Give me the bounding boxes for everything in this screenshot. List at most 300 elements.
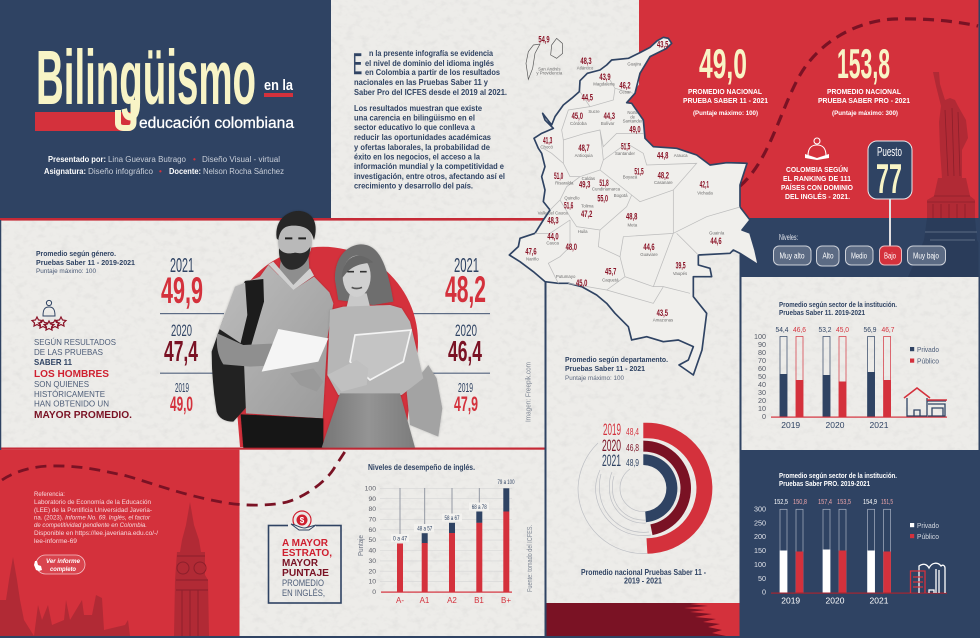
heading: en la: en la [264,77,294,94]
gender conclusion: MAYOR PROMEDIO. [34,410,132,421]
ring 2021 [643,454,677,522]
map department names: de [630,114,636,119]
values: 54,4 [776,325,788,334]
map values: 54,9 [538,34,550,44]
values: 53,2 [818,325,832,334]
values [776,325,894,334]
map department names: Santander [623,119,643,124]
map values: 55,0 [597,194,608,204]
intro paragraph: el nivel de dominio del idioma inglés [365,59,495,68]
woman [322,244,442,448]
horizontal red rule [0,218,545,221]
map values: 44,6 [710,236,722,246]
illustration: Big Ben [174,502,209,636]
map department names: Caquetá [602,277,619,282]
map department names: Quindío [564,196,580,201]
map values: 47,6 [525,246,537,256]
map department names: Boyacá [623,175,638,180]
national average Saber 11: PROMEDIO NACIONAL [688,87,762,96]
face [343,256,371,297]
map values: 48,2 [658,170,669,180]
national average Saber 11: 49,0 [699,40,747,87]
map department names: Vichada [697,191,713,196]
map values: 44,5 [582,93,593,103]
years: 2020 [826,596,845,606]
intro paragraph: sector educativo lo que conlleva a [354,123,476,132]
x labels [396,596,511,605]
bars [397,488,509,592]
national average Saber 11: PRUEBA SABER 11 - 2021 [683,96,768,105]
panel: red top right [627,0,980,277]
chart title: Niveles de desempeño de inglés. [368,463,475,472]
map department names: Guainía [709,231,725,236]
map values: 48,3 [547,216,559,226]
department heading: Puntaje máximo: 100 [565,375,624,382]
report button: Ver informe [46,558,80,565]
heading: Pruebas Saber PRO. 2019-2021 [779,479,870,488]
radial chart [578,420,712,554]
radial guides [578,443,651,554]
gender conclusion [34,337,132,421]
department heading: Pruebas Saber 11 - 2021 [565,364,646,373]
credits: • [159,167,162,176]
strata text [282,538,332,598]
men stats [160,255,224,416]
heading [779,300,897,317]
legend: Privado [917,347,939,354]
women stats: 2021 [454,255,479,277]
map values: 43,5 [657,39,668,49]
horizontal red rule bottom [0,448,545,450]
level button [774,246,811,265]
torso [327,305,423,395]
source: Fuente: tomado del ICFES. [527,525,534,592]
ranking text [781,165,853,201]
y axis: 30 [758,388,766,397]
map values: 44,6 [643,242,655,252]
women stats: 48,2 [445,269,486,310]
map values: 51,0 [554,171,563,181]
map department names: Meta [628,223,638,228]
panel: title: Bilingüismo [36,35,256,121]
y axis labels: 90 [368,496,376,503]
values: 150,8 [793,497,807,506]
map values: 45,0 [572,111,583,121]
dashed route upper [740,19,978,186]
axis line [381,592,512,593]
map department names: Vaupés [673,271,687,276]
reference text: (LEE) de la Pontificia Universidad Javeria- [34,507,152,514]
reference text: Disponible en https://lee.javeriana.edu.co/-/ [34,530,158,537]
y axis [754,504,766,596]
radial labels: 48,9 [626,458,639,469]
backpack [212,279,263,422]
y axis: 40 [758,380,766,389]
intro paragraph: n la presente infografía se evidencia [369,49,493,58]
level button: Bajo [884,252,896,260]
heading gender: Pruebas Saber 11 - 2019-2021 [36,258,135,267]
map department names: Cauca [546,240,560,245]
strata text: ESTRATO, [282,548,332,559]
illustration: Statue of Liberty [908,72,980,277]
strata text: A MAYOR [282,538,329,549]
ranking text: COLOMBIA SEGÚN [786,165,848,174]
map department names: Norte [627,110,639,115]
neck [278,255,310,292]
panel: reference [0,450,346,636]
y axis: 100 [754,332,766,341]
radial caption: Promedio nacional Pruebas Saber 11 - [581,568,706,577]
gender conclusion: DE LAS PRUEBAS [34,347,103,357]
credits: Lina Guevara Butrago [108,155,187,164]
map department names: Risaralda [555,180,574,185]
y axis: 50 [758,372,766,381]
map values: 49,0 [629,124,641,134]
gender conclusion: HAN OBTENIDO UN [34,398,109,408]
panel: title [0,0,331,218]
gender conclusion: SABER 11 [34,357,72,367]
y axis labels: 0 [372,589,376,596]
strata text: PROMEDIO [282,578,324,588]
level button [816,246,839,266]
legend: Público [917,358,939,366]
map values: 41,3 [543,135,552,145]
map department names: y Providencia [536,71,563,76]
skirt [322,393,415,448]
credits: • [193,155,196,164]
values: 154,9 [863,497,877,506]
map values: 51,6 [564,200,573,210]
y axis title: Puntaje [356,535,365,556]
values: 46,7 [882,325,894,334]
y axis: 90 [758,340,766,349]
map values: 51,8 [599,178,609,188]
map values [525,34,722,318]
radial labels [602,420,639,470]
map department names: Casanare [654,180,673,185]
ranking badge: Puesto [877,144,902,159]
map department names: Arauca [674,153,688,158]
reference text: Laboratorio de Economía de la Educación [34,499,151,506]
credits: Asignatura: [44,167,86,176]
levels: Niveles: [779,233,798,242]
ranking text: PAÍSES CON DOMINIO [781,183,853,192]
map of Colombia [509,34,758,375]
skyline [0,502,209,636]
map values: 47,2 [581,209,592,219]
map values: 48,7 [578,143,590,153]
page frame bottom [0,636,980,638]
map department names: Amazonas [653,318,673,323]
heading: Promedio según sector de la institución. [779,300,897,309]
bar range labels: 68 a 78 [472,504,487,511]
panel: department and national [546,355,740,636]
y axis: 60 [758,364,766,373]
map department names: Cesar [619,90,631,95]
legend: Privado [917,523,939,530]
y axis labels: 40 [368,548,376,554]
dashed route lower [2,450,346,505]
map department names: Caldas [582,176,595,181]
values [774,497,893,506]
map outline [509,37,758,375]
national average Saber Pro: PROMEDIO NACIONAL [827,87,901,96]
red circle behind students [228,247,418,447]
map values: 44,8 [657,150,668,160]
panel divider [740,253,742,638]
reference text [34,491,158,545]
map department names: Bolívar [601,121,615,126]
axis [771,416,947,418]
icon: person reading [805,138,829,160]
credits: Docente: [169,167,201,176]
image credit: Imagen: Freepik.com [526,362,532,422]
y axis labels: 60 [368,527,376,534]
eyes [285,235,306,241]
beard [279,247,310,270]
illustration: Westminster [0,557,130,636]
panel divider [544,282,546,638]
leader lines [400,488,479,537]
map values: 44,0 [547,231,559,241]
strata text: MAYOR [282,558,319,569]
intro paragraph: en Colombia a partir de los resultados [365,68,501,77]
y axis: 200 [754,532,766,541]
heading: Promedio según sector de la institución. [779,471,897,480]
years: 2019 [781,596,800,606]
map department names: Guaviare [640,252,658,257]
y axis: 50 [758,574,766,583]
map department names: Atlántico [577,66,594,71]
y axis labels: 70 [368,516,376,524]
panel: sector Saber 11 [754,300,947,430]
map values: 43,5 [657,308,668,318]
heading gender: Puntaje máximo: 100 [36,268,96,275]
intro paragraph: éxito en los negocios, el acceso a la [354,152,481,162]
bar range labels: 58 a 67 [444,515,460,522]
panel: gender [32,211,532,448]
men stats: 49,0 [170,393,193,416]
ranking text: EL RANKING DE 111 [783,174,851,183]
reference text: de competitividad pendiente en Colombia. [34,522,147,529]
years: 2019 [781,420,800,430]
map values: 51,5 [634,166,644,176]
y axis labels: 80 [368,506,376,513]
icon: hand [34,561,42,571]
report button: completo [50,566,76,573]
y axis: 0 [762,412,766,421]
panel: sector Saber Pro [742,450,980,638]
photo: students [212,211,442,448]
strata text: PUNTAJE [282,568,329,579]
national average Saber Pro: 153,8 [837,40,890,87]
intro paragraph: y ofertas laborales, la probabilidad de [354,143,491,152]
reference text: na. (2023). Informe No. 69. Inglés, el factor [34,514,151,522]
icon: person with stars [32,300,66,330]
fringe [342,256,373,278]
y axis: 80 [758,348,766,357]
y axis labels: 20 [368,568,376,576]
reference text: lee-informe-69 [34,538,77,545]
map values: 45,0 [576,278,587,288]
intro paragraph: Los resultados muestran que existe [354,104,483,113]
men stats: 2020 [171,321,192,340]
gender conclusion: HISTÓRICAMENTE [34,389,105,399]
level button: Alto [822,252,834,260]
map values: 48,0 [566,242,577,252]
credits: Nelson Rocha Sánchez [203,167,284,176]
paper [262,329,328,372]
years [781,420,889,430]
y axis: 10 [758,404,766,413]
map department names: Guajira [627,62,642,67]
ranking badge [868,141,912,202]
x labels: B+ [501,596,511,605]
bar range labels: 48 a 57 [417,526,432,532]
intro paragraph: E [353,48,362,81]
men stats: 49,9 [161,270,203,311]
y axis: 70 [758,356,766,365]
axis [771,592,947,594]
y axis: 250 [754,518,766,528]
women stats [413,255,490,416]
bar range labels: 79 a 100 [498,479,515,486]
strap [239,279,264,352]
hands [327,360,368,392]
icon: money hand: $ [300,516,305,525]
national average Saber Pro: (Puntaje máximo: 300) [832,110,898,117]
intro paragraph: Saber Pro del ICFES desde el 2019 al 2021. [354,88,507,97]
heading: red bar [35,112,131,131]
heading [779,471,897,488]
years: 2020 [826,420,845,430]
values: 153,5 [837,497,851,506]
map department names: Antioquia [575,153,593,158]
page frame [0,220,1,450]
values: 45,0 [836,325,849,334]
legend [910,347,939,366]
map department names: Magdalena [593,82,615,87]
connector ranking [889,198,891,246]
y axis: 0 [762,588,766,596]
department heading [565,355,668,382]
man [212,211,333,448]
years [781,596,889,606]
map department names: San Andrés [538,66,561,71]
bars [780,509,891,593]
credits: Diseño Visual - virtual [202,155,280,164]
map values: 45,7 [605,266,616,276]
national average Saber Pro [818,40,910,117]
level button: Medio [851,252,867,260]
map department names: Huila [578,229,588,234]
map department names: Putumayo [556,274,576,279]
radial labels: 2020 [602,436,621,455]
level button [880,246,902,265]
bottom band [546,603,740,636]
values: 157,4 [818,497,832,506]
map values: 44,3 [604,111,615,121]
notebook [350,330,411,380]
ring 2019 [643,423,712,554]
x labels: A1 [420,596,430,605]
gender conclusion: SON QUIENES [34,379,89,389]
map department names: Santander [615,151,636,156]
map values: 42,1 [700,180,709,190]
map department names: Córdoba [570,121,587,126]
y axis: 300 [754,504,766,514]
y axis [754,332,766,421]
gender conclusion: LOS HOMBRES [34,369,109,380]
radial labels: 46,8 [626,443,639,454]
y axis: 20 [758,396,766,405]
map department names: Cundinamarca [592,187,621,192]
level button [908,246,946,265]
intro paragraph: nacionales en las Pruebas Saber 11 y [354,78,489,87]
intro paragraph: una carencia en bilingüismo en el [354,114,475,122]
gender conclusion: SEGÚN RESULTADOS [34,337,116,347]
values: 56,9 [864,325,876,334]
values: 152,5 [774,497,788,506]
map values: 51,5 [621,141,630,151]
map values: 43,9 [599,72,611,82]
y axis labels: 30 [368,558,376,565]
men stats: 47,4 [164,336,198,368]
heading gender: Promedio según género. [36,249,116,258]
women stats: 2020 [455,321,477,340]
intro paragraph: información mundial y la competitividad e [354,162,505,171]
pants [241,414,323,448]
collar [268,262,314,290]
y axis: 100 [754,560,766,569]
y axis labels: 50 [368,537,376,544]
shirt [219,265,333,418]
map values: 46,2 [619,80,631,90]
level button [846,246,873,265]
callout: strata [268,511,341,603]
icon: buildings [910,563,945,593]
heading: Pruebas Saber 11. 2019-2021 [779,308,865,317]
intro paragraph [353,48,507,190]
hair [335,244,393,305]
chart: performance levels [356,463,534,605]
intro paragraph: crecimiento y desarrollo del país. [354,182,473,190]
map values: 48,3 [580,56,592,66]
page frame right [978,0,980,638]
bars [780,336,891,416]
women stats: 47,9 [454,393,478,416]
icon: house [904,388,947,416]
bar range labels: 0 a 47 [393,536,407,542]
hair [276,211,316,240]
ranking badge: 77 [876,155,902,202]
San Andrés islands [526,38,563,79]
x labels: A2 [447,596,457,605]
report button [34,555,85,574]
map department names: Bogotá [614,193,628,198]
map values: 49,3 [579,180,590,190]
national average Saber Pro: PRUEBA SABER PRO - 2021 [818,96,910,105]
icon: g hook [118,100,134,128]
ring 2020 [643,441,691,535]
x labels: A- [396,596,404,605]
values: 46,6 [793,325,806,334]
features [347,269,367,274]
map values: 39,5 [676,261,686,271]
intro paragraph: investigación, entre otros, afectando así el [354,172,505,181]
department heading: Promedio según departamento. [565,355,668,364]
map department names: Valle del Cauca [538,211,568,216]
